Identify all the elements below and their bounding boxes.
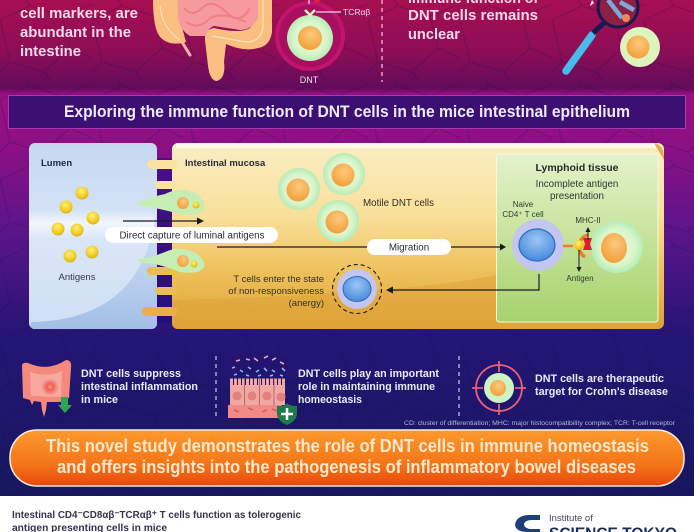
text: incomplete antigen presentation: Incomplete antigen <box>536 179 618 190</box>
divider: bottom row right <box>458 356 460 420</box>
intro text: intestine markers <box>20 6 138 60</box>
text: therapeutic target: target for Crohn's disease <box>535 386 668 398</box>
heading: mucosa: Intestinal mucosa <box>185 158 266 169</box>
heading banner: Exploring the immune function of DNT cells in the mice intestinal epithelium <box>64 103 630 121</box>
motile DNT cells <box>278 153 365 242</box>
cell: antigen-capturing DNT cell top <box>137 190 204 215</box>
text: suppress inflammation: DNT cells suppress <box>81 368 181 380</box>
panel: intestinal mucosa <box>142 143 664 329</box>
conclusion banner: and offers insights into the pathogenesis of inflammatory bowel diseases <box>57 457 636 477</box>
arrow: capture <box>123 218 204 224</box>
arrow: back to anergic T cell <box>386 274 539 294</box>
conclusion banner: This novel study demonstrates the role of DNT cells in immune homeostasis <box>46 436 649 456</box>
arrow: MHC-II pointer <box>586 227 590 240</box>
intro text: unclear function: DNT cells remains <box>408 8 538 24</box>
cell: antigen presenting DNT <box>591 221 643 273</box>
divider: bottom row left <box>215 356 217 420</box>
text: anergy: of non-responsiveness <box>228 286 324 297</box>
antigens group <box>52 186 100 262</box>
panel: lumen <box>29 143 157 329</box>
divider: top row <box>381 0 383 82</box>
text: anergy <box>228 274 324 309</box>
intro text: unclear function: unclear <box>408 27 460 43</box>
icon: epithelium with shield <box>228 356 297 425</box>
icon: inflamed colon with down arrow <box>22 360 72 417</box>
footnote: abbreviations: CD: cluster of differentiation; MHC: major histocompatibility complex; TCR: T-cell receptor <box>404 420 675 427</box>
text: homeostasis <box>298 368 439 406</box>
citation: Intestinal CD4⁻CD8αβ⁻TCRαβ⁺ T cells function as tolerogenic <box>12 509 301 521</box>
conclusion banner <box>10 430 684 486</box>
label: antigens: Antigens <box>59 272 96 283</box>
label: naive CD4 T cell: Naive <box>513 200 534 209</box>
heading banner <box>8 96 686 128</box>
heading: lumen: Lumen <box>41 158 72 169</box>
intro text: intestine markers: cell markers, are <box>20 6 138 22</box>
cell: anergic T cell <box>332 264 382 314</box>
intro text: intestine markers: abundant in the <box>20 25 131 41</box>
panel: epithelial gap <box>155 158 174 323</box>
cell: naive T cell <box>512 219 564 271</box>
arrow: antigen pointer <box>576 250 582 272</box>
heading: lymphoid tissue: Lymphoid tissue <box>535 162 619 174</box>
label: DNT: DNT <box>300 75 319 85</box>
cell: antigen-capturing DNT cell bottom <box>137 249 204 273</box>
text: suppress inflammation <box>81 368 198 406</box>
icon: magnifying glass over DNT cell <box>566 0 660 71</box>
label: antigen: Antigen <box>566 274 594 283</box>
intro text: unclear function <box>408 0 538 43</box>
text: homeostasis: role in maintaining immune <box>298 381 435 393</box>
arrow: migration <box>217 244 506 250</box>
text: incomplete antigen presentation <box>536 179 618 202</box>
text: therapeutic target: DNT cells are therapeutic <box>535 373 664 385</box>
text: homeostasis: homeostasis <box>298 394 362 406</box>
text: anergy: (anergy) <box>289 298 324 309</box>
panel: lymphoid tissue <box>496 154 658 322</box>
text: incomplete antigen presentation: presentation <box>550 191 604 202</box>
synapse: TCR MHC-II antigen <box>563 235 592 257</box>
intro text: intestine markers: intestine <box>20 44 81 60</box>
label: direct capture: Direct capture of luminal antigens <box>120 230 265 242</box>
icon: target on DNT cell <box>472 361 526 415</box>
label: migration <box>367 239 451 255</box>
text: anergy: T cells enter the state <box>233 274 324 285</box>
logo: Institute of Science Tokyo <box>515 513 677 532</box>
epithelial folds <box>142 160 177 316</box>
label: MHC-II: MHC-II <box>575 216 601 225</box>
text: suppress inflammation: in mice <box>81 394 118 406</box>
label: TCR: TCRαβ <box>343 7 370 17</box>
text: suppress inflammation: intestinal inflammation <box>81 381 198 393</box>
text: homeostasis: DNT cells play an important <box>298 368 439 380</box>
label: motile DNT cells: Motile DNT cells <box>363 198 434 209</box>
logo: Institute of Science Tokyo: Institute of <box>549 513 593 524</box>
citation <box>12 509 301 532</box>
text: therapeutic target <box>535 373 668 398</box>
label: naive CD4 T cell <box>502 200 544 219</box>
icon: intestine <box>153 0 272 81</box>
label: migration: Migration <box>389 242 429 254</box>
label: direct capture <box>105 227 278 243</box>
icon: DNT cell with TCR <box>275 0 370 71</box>
label: naive CD4 T cell: CD4⁺ T cell <box>502 210 544 219</box>
